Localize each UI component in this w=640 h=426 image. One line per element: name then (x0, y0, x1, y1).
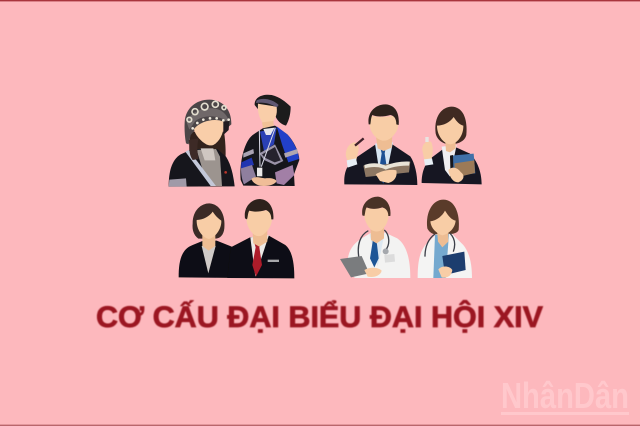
panel: medical professionals (340, 197, 472, 278)
panel: intellectuals and educators (344, 104, 482, 185)
figure: woman in black suit (179, 203, 242, 278)
figure: woman in blue embroidered jacket (240, 95, 299, 186)
figure: woman in silver headdress (169, 100, 235, 187)
figure: man with open book and pen (344, 104, 417, 185)
figure: man in black suit with red tie (227, 199, 294, 278)
title: CƠ CẤU ĐẠI BIỂU ĐẠI HỘI XIV (96, 300, 543, 334)
panel: party and state officials (179, 199, 294, 278)
figure: male doctor with clipboard (340, 197, 410, 278)
figure: woman with books (422, 107, 482, 184)
panel: ethnic minority delegates (169, 95, 299, 187)
figure: female doctor with folder (418, 200, 472, 278)
